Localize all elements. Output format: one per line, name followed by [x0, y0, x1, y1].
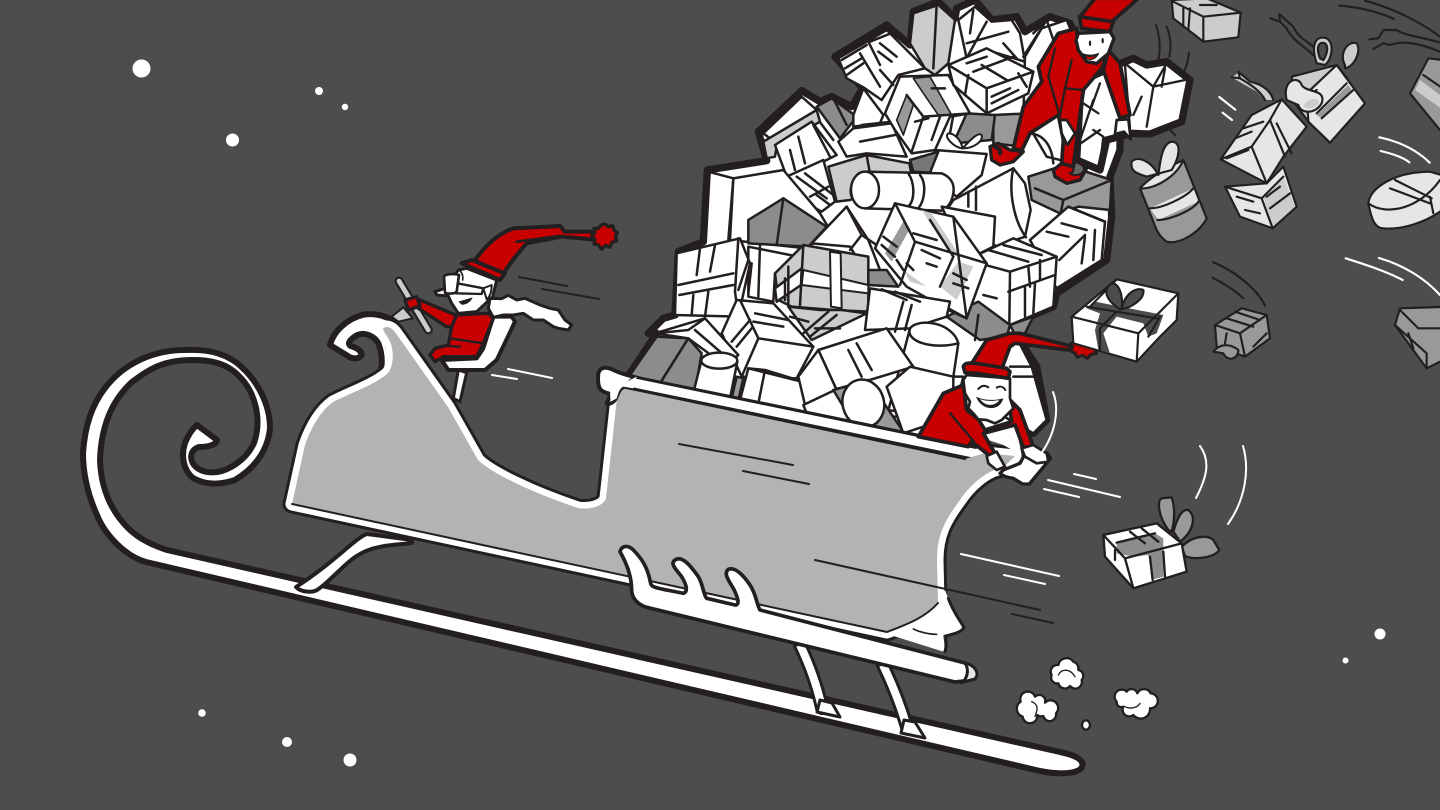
present small grey [1213, 308, 1270, 359]
pompom [592, 224, 617, 249]
face details [976, 386, 1005, 408]
hands [1060, 119, 1131, 145]
front nose [885, 590, 964, 652]
back box behind top elf [1077, 25, 1190, 170]
paper [983, 423, 1022, 455]
present right grey upper [1410, 58, 1440, 133]
driver elf seat, stick and figure [392, 224, 617, 402]
grey side panel [292, 327, 1015, 632]
cylinder and cones lower [675, 203, 1057, 340]
white speed lines [492, 369, 1246, 584]
front boxes [630, 300, 1047, 437]
braid [488, 295, 572, 330]
hat [475, 226, 595, 277]
stick link [392, 307, 413, 322]
pompom [1071, 339, 1097, 358]
rear post knob [598, 368, 637, 404]
hat band [1079, 17, 1113, 32]
santa elf at the front [918, 333, 1097, 470]
left sleigh strut [296, 534, 412, 592]
lower rail with hooks [620, 546, 977, 682]
top curl [330, 314, 395, 377]
front flying present [1103, 497, 1219, 588]
falling presents [1072, 0, 1440, 368]
arm [418, 300, 460, 327]
bow [1159, 497, 1219, 558]
present falling centre pair [1221, 14, 1365, 228]
rim [615, 379, 975, 453]
top elf [990, 0, 1138, 183]
present pile [630, 0, 1120, 440]
box [1103, 523, 1187, 588]
hat [1080, 0, 1138, 23]
snow puffs [1017, 658, 1158, 730]
legs and torso [1013, 28, 1110, 167]
glove [405, 297, 420, 310]
body [918, 385, 1033, 456]
seat [442, 317, 515, 370]
strap and goggles [444, 270, 492, 305]
beard and face [963, 375, 1013, 423]
seat post [453, 370, 467, 402]
boots [990, 143, 1087, 183]
hat band [963, 363, 1010, 378]
present right grey lower [1395, 307, 1440, 368]
far right ribbon [1369, 30, 1440, 55]
present top grey [1172, 0, 1241, 42]
dark speed lines [519, 277, 1053, 623]
head [1076, 32, 1114, 63]
panel edge lines [292, 388, 965, 632]
pile silhouette [630, 0, 1120, 440]
hat band [462, 260, 505, 280]
light motion marks [1219, 97, 1440, 295]
sleigh body [292, 314, 1015, 652]
present white with dark ribbon [1072, 279, 1178, 362]
right arm [1103, 50, 1130, 118]
torso and leg [430, 313, 493, 362]
present oval [1368, 172, 1440, 229]
sleigh runner with spiral [83, 350, 1083, 773]
right sleigh struts [800, 645, 925, 738]
present can [1131, 142, 1207, 242]
stick [399, 281, 428, 330]
face details [1082, 38, 1104, 60]
white trim [292, 327, 1015, 632]
far boxes [708, 5, 1113, 302]
face [435, 268, 497, 313]
left hand [987, 452, 1005, 470]
hat [972, 333, 1075, 369]
ribboned box centre [885, 48, 1033, 153]
snowflakes [132, 60, 1386, 766]
front hook [1000, 445, 1051, 484]
dark motion arcs [1213, 1, 1440, 306]
